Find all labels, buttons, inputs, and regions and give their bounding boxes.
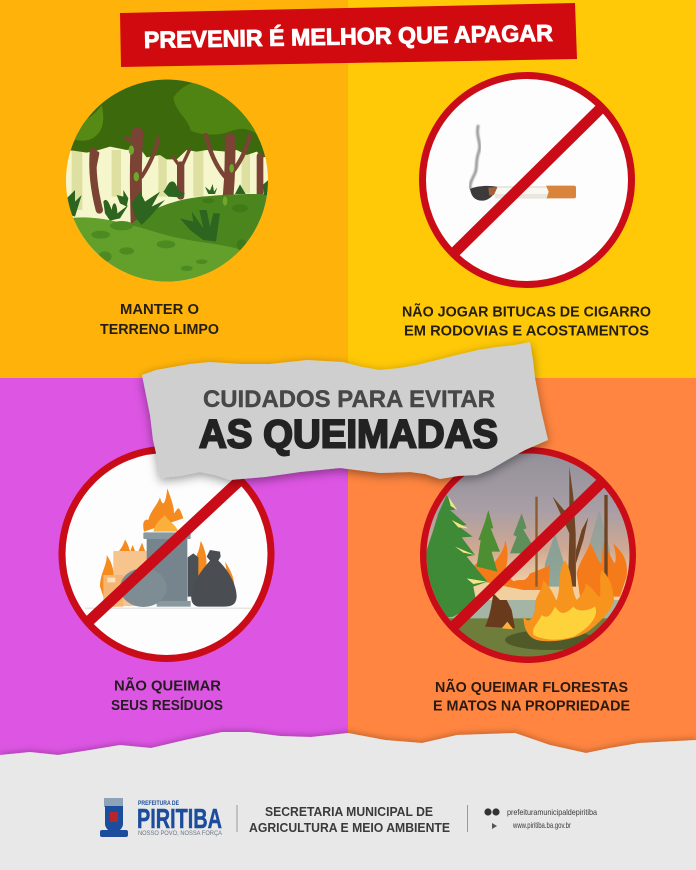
label: não queimar florestas: E MATOS NA PROPRIEDADE xyxy=(433,698,630,714)
label: não jogar bitucas xyxy=(402,302,651,340)
icon: burning trash xyxy=(85,488,252,609)
panel: top-right background xyxy=(348,0,696,378)
icon: coat of arms xyxy=(100,798,128,837)
label: manter o terreno limpo: TERRENO LIMPO xyxy=(100,322,219,338)
social and website: www.piritiba.ba.gov.br xyxy=(512,820,571,830)
icon: no cigarette sign xyxy=(422,76,632,284)
panel: bottom-left background xyxy=(0,378,348,758)
torn paper: central heading xyxy=(142,342,548,480)
social and website: prefeituramunicipaldepiritiba xyxy=(507,807,597,817)
icon: no forest fire sign xyxy=(420,447,636,663)
heading line 1: CUIDADOS PARA EVITAR xyxy=(203,386,495,413)
label: não queimar resíduos: NÃO QUEIMAR xyxy=(114,676,221,694)
icon: no burning waste sign xyxy=(62,450,271,658)
label: não jogar bitucas: NÃO JOGAR BITUCAS DE CIGARRO xyxy=(402,302,651,320)
torn paper: footer xyxy=(0,732,696,870)
logo: Piritiba xyxy=(100,798,223,837)
label: não queimar florestas: NÃO QUEIMAR FLORESTAS xyxy=(435,678,628,696)
label: não queimar florestas xyxy=(433,678,630,714)
panel: top-left background xyxy=(0,0,348,378)
label: não queimar resíduos xyxy=(111,676,223,714)
icon: forest circle xyxy=(66,80,268,282)
social and website xyxy=(484,807,597,830)
illustration: burning forest xyxy=(426,454,630,656)
panel: bottom-right background xyxy=(348,378,696,758)
title banner xyxy=(120,3,577,67)
logo: Piritiba: NOSSO POVO, NOSSA FORÇA xyxy=(138,830,223,837)
label: não queimar resíduos: SEUS RESÍDUOS xyxy=(111,697,223,714)
label: manter o terreno limpo xyxy=(100,302,219,338)
logo: Piritiba: PREFEITURA DE xyxy=(138,801,179,807)
slash xyxy=(454,480,604,626)
icon: cigarette xyxy=(470,125,576,201)
logo: Piritiba: PIRITIBA xyxy=(137,803,222,834)
slash xyxy=(453,106,603,254)
label: manter o terreno limpo: MANTER O xyxy=(120,302,199,318)
heading line 2: AS QUEIMADAS xyxy=(199,412,498,456)
department name xyxy=(249,805,450,835)
label: não jogar bitucas: EM RODOVIAS E ACOSTAMENTOS xyxy=(404,322,649,340)
department name: AGRICULTURA E MEIO AMBIENTE xyxy=(249,821,450,835)
slash xyxy=(88,482,238,622)
department name: SECRETARIA MUNICIPAL DE xyxy=(265,805,433,819)
title: PREVENIR É MELHOR QUE APAGAR xyxy=(144,19,553,53)
